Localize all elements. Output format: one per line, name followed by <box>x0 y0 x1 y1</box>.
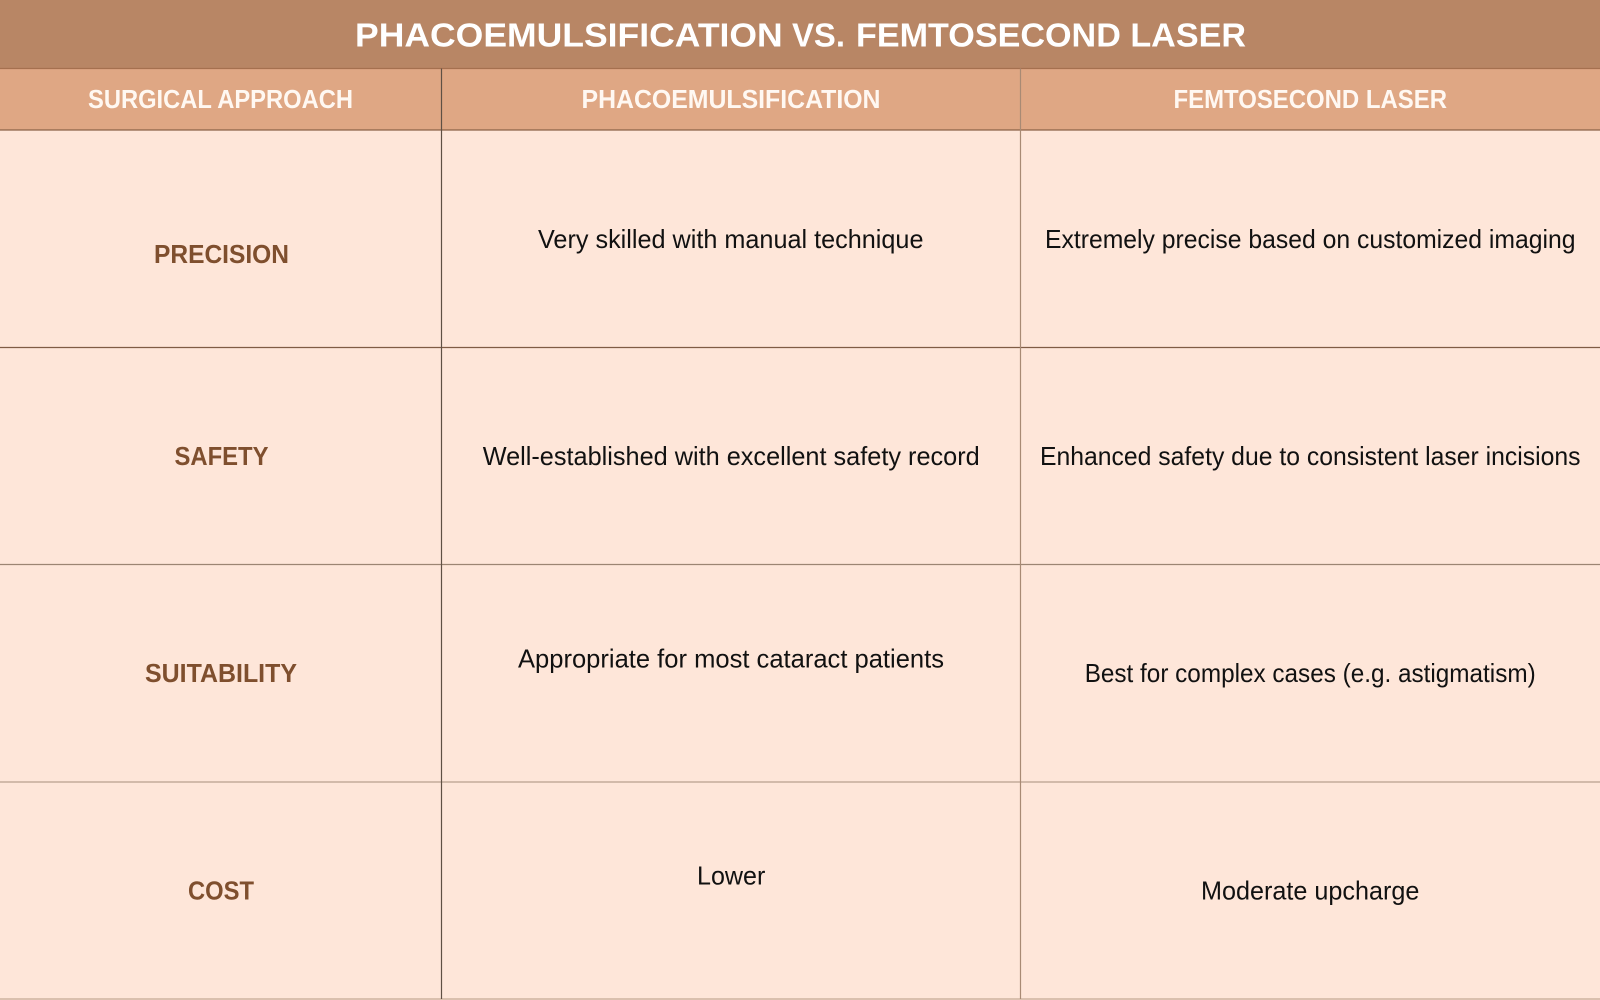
row: precision: PRECISION <box>154 239 289 269</box>
title banner: FEMTOSECOND LASER <box>856 17 1246 54</box>
row: precision: Very skilled with manual technique <box>538 224 924 254</box>
row: suitability: Appropriate for most cataract patients <box>518 644 944 674</box>
row: precision: Extremely precise based on customized imaging <box>1045 224 1576 254</box>
row: suitability <box>145 644 1536 688</box>
header row <box>0 68 1600 130</box>
title banner: PHACOEMULSIFICATION <box>355 17 783 54</box>
row: cost <box>188 860 1419 906</box>
header: femtosecond laser: FEMTOSECOND LASER <box>1174 84 1447 114</box>
row: safety: SAFETY <box>174 441 268 471</box>
row: safety <box>174 441 1580 471</box>
title banner: VS. <box>792 17 845 54</box>
row: precision <box>154 224 1576 269</box>
title banner <box>0 0 1600 68</box>
header: surgical approach: SURGICAL APPROACH <box>88 84 353 114</box>
row: suitability: SUITABILITY <box>145 658 297 688</box>
row: cost: Moderate upcharge <box>1201 876 1419 906</box>
row: cost: COST <box>188 876 254 906</box>
header: phacoemulsification: PHACOEMULSIFICATION <box>582 84 880 114</box>
row: safety: Enhanced safety due to consistent laser incisions <box>1040 441 1580 471</box>
row: suitability: Best for complex cases (e.g. astigmatism) <box>1085 658 1536 688</box>
row: safety: Well-established with excellent safety record <box>483 441 980 471</box>
row: cost: Lower <box>697 860 766 890</box>
